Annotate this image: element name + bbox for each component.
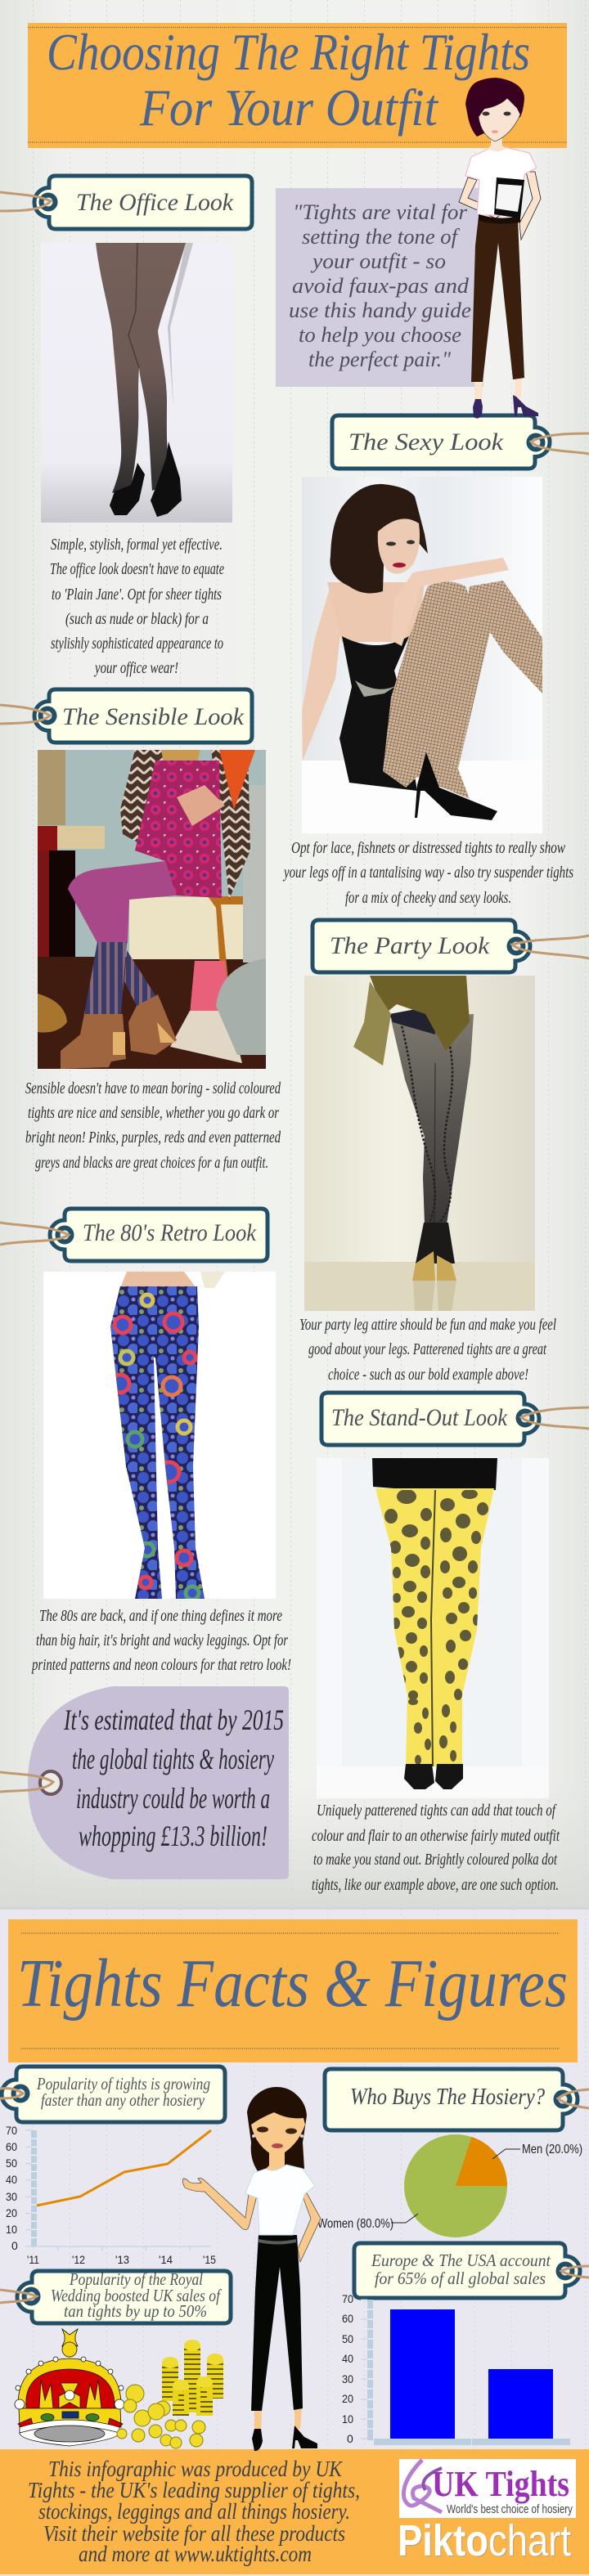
underwear xyxy=(389,1006,435,1034)
neck xyxy=(488,137,506,151)
shoe xyxy=(415,752,497,820)
dress xyxy=(135,761,222,898)
tag: The 80's Retro Look xyxy=(0,1209,268,1261)
line chart: popularity growth: '11 xyxy=(27,2253,39,2266)
photo: retro look leggings xyxy=(43,1272,276,1600)
tag: europe and usa xyxy=(354,2243,589,2298)
arch xyxy=(18,2358,121,2408)
tag: popularity of tights: Popularity of tights is growing xyxy=(36,2074,210,2094)
boots xyxy=(61,1014,126,1069)
cross and orb xyxy=(62,2329,78,2346)
line chart: popularity growth: 30 xyxy=(6,2190,17,2203)
callout: industry worth: the global tights & hosiery xyxy=(72,1743,274,1775)
text: office look description xyxy=(50,536,224,677)
footer band: and more at www.uktights.com xyxy=(79,2542,312,2566)
face xyxy=(251,2112,305,2157)
text: retro look description xyxy=(31,1607,291,1674)
face xyxy=(378,518,420,574)
line chart: popularity growth: '13 xyxy=(115,2253,129,2266)
bar chart: global sales: 30 xyxy=(342,2372,353,2385)
tag: The Sensible Look: The Sensible Look xyxy=(62,703,245,730)
tag: europe and usa: for 65% of all global sales xyxy=(375,2269,546,2288)
line chart: popularity growth: 0 xyxy=(11,2239,18,2252)
torso xyxy=(327,582,425,642)
back arm xyxy=(302,590,340,761)
text: office look description: (such as nude or black) for a xyxy=(65,610,209,628)
text: office look description: Simple, stylish, formal yet effective. xyxy=(51,536,223,554)
text: sexy look description xyxy=(283,839,573,907)
panel: quote: avoid faux-pas and xyxy=(292,274,470,298)
tag: The Stand-Out Look xyxy=(321,1393,589,1445)
hair xyxy=(161,750,200,761)
tag: popularity of tights xyxy=(0,2067,225,2122)
left arm xyxy=(182,2179,257,2230)
text: retro look description: than big hair, it's bright and wacky leggings. Opt for xyxy=(36,1631,288,1649)
line chart: popularity growth: 60 xyxy=(6,2140,17,2153)
coloured scarf xyxy=(219,750,255,810)
bar chart: global sales: 0 xyxy=(347,2432,353,2445)
footer band: Tights - the UK's leading supplier of tights, xyxy=(28,2478,360,2502)
tag: The 80's Retro Look: The 80's Retro Look xyxy=(83,1219,257,1246)
pie chart: who buys xyxy=(317,2134,582,2237)
dark lower left xyxy=(49,850,75,957)
trousers xyxy=(251,2235,303,2411)
tag: europe and usa: Europe & The USA account xyxy=(371,2251,551,2270)
bar chart: global sales: 40 xyxy=(342,2352,353,2365)
tag: royal wedding: tan tights by up to 50% xyxy=(64,2301,207,2321)
text: party look description xyxy=(299,1316,556,1384)
trousers xyxy=(471,217,524,382)
red cap xyxy=(26,2369,115,2408)
tag: royal wedding: Popularity of the Royal xyxy=(69,2269,203,2289)
panel: quote: setting the tone of xyxy=(302,225,461,249)
gold band xyxy=(19,2408,121,2427)
leg pattern xyxy=(401,1022,452,1227)
legs and shoes xyxy=(474,378,522,402)
pie chart: who buys: Women (80.0%) xyxy=(317,2217,393,2231)
callout: industry worth xyxy=(0,1686,289,1879)
neck xyxy=(266,2151,290,2172)
tag: The Office Look xyxy=(0,176,252,229)
callout: industry worth: It's estimated that by 2015 xyxy=(63,1703,284,1736)
hands xyxy=(177,785,225,826)
line chart: popularity growth: 40 xyxy=(6,2173,17,2186)
logo: Piktochart: Piktochart xyxy=(398,2517,572,2566)
shoes xyxy=(252,2429,263,2451)
tablet xyxy=(494,177,524,218)
line chart: popularity growth: 10 xyxy=(6,2223,17,2236)
pearls xyxy=(15,2399,25,2409)
line chart: popularity growth: '14 xyxy=(159,2253,173,2266)
line chart: popularity growth: '12 xyxy=(72,2253,85,2266)
bar chart: global sales: 20 xyxy=(342,2392,353,2405)
line chart: popularity growth: 50 xyxy=(6,2156,17,2170)
icon: crown xyxy=(15,2329,124,2446)
illustration: woman with tablet xyxy=(459,78,541,419)
icon: gold coins xyxy=(117,2340,223,2448)
panel: quote: to help you choose xyxy=(299,323,461,347)
hair xyxy=(330,484,428,593)
hair xyxy=(247,2087,307,2171)
logo: UK Tights: UK Tights xyxy=(432,2464,569,2504)
tag: The Party Look xyxy=(312,920,589,972)
facts banner xyxy=(8,1919,578,2062)
chair xyxy=(129,897,252,959)
text: sexy look description: for a mix of cheeky and sexy looks. xyxy=(345,889,511,907)
text: retro look description: printed patterns and neon colours for that retro look! xyxy=(31,1656,291,1674)
tag: royal wedding xyxy=(0,2269,231,2323)
shoes xyxy=(416,1223,455,1263)
text: office look description: to 'Plain Jane'. Opt for sheer tights xyxy=(52,586,222,604)
illustration: presenter woman xyxy=(182,2087,321,2451)
callout: industry worth: industry could be worth a xyxy=(76,1782,270,1815)
bar chart: global sales: 50 xyxy=(342,2332,353,2345)
floor xyxy=(38,957,266,1069)
tag: The Sensible Look xyxy=(0,689,252,743)
page background: upper section xyxy=(0,0,589,1910)
tag: royal wedding: Wedding boosted UK sales of xyxy=(51,2286,223,2305)
shoes xyxy=(404,1764,463,1789)
sheer legs xyxy=(391,1014,474,1224)
callout: industry worth: whopping £13.3 billion! xyxy=(79,1820,268,1852)
footer band xyxy=(0,2449,589,2576)
hair xyxy=(465,78,524,137)
panel: quote: "Tights are vital for xyxy=(293,200,468,224)
logo: Piktochart: Piktochart xyxy=(398,2516,571,2565)
text: sensible look description: greys and blacks are great choices for a fun outfit. xyxy=(35,1154,268,1172)
bag xyxy=(190,961,227,1011)
tag: The Office Look: The Office Look xyxy=(76,189,234,216)
loose coins xyxy=(117,2385,205,2448)
dress xyxy=(339,636,417,791)
socks xyxy=(84,942,127,1014)
fishnet legs xyxy=(446,581,542,769)
text: sensible look description xyxy=(25,1079,281,1172)
photo: party look xyxy=(304,976,535,1311)
tag: The Sexy Look xyxy=(332,415,589,469)
photo: sexy look xyxy=(302,477,542,833)
white rim xyxy=(20,2420,119,2435)
tights xyxy=(68,861,176,943)
tag: who buys the hosiery: Who Buys The Hosiery? xyxy=(350,2085,545,2110)
text: office look description: The office look doesn't have to equate xyxy=(50,560,224,578)
panel: quote: use this handy guide xyxy=(289,298,471,322)
line chart: popularity growth: '15 xyxy=(203,2253,216,2266)
panel: quote: the perfect pair." xyxy=(308,348,451,371)
trousers legs skin xyxy=(254,2407,302,2433)
skirt xyxy=(372,1458,497,1492)
bar chart: global sales: 70 xyxy=(342,2292,353,2305)
bar chart: global sales xyxy=(342,2292,570,2445)
text: sensible look description: bright neon! Pinks, purples, reds and even patterned xyxy=(25,1129,281,1147)
line chart: popularity growth: 70 xyxy=(6,2124,17,2137)
footer band: stockings, leggings and all things hosiery. xyxy=(38,2499,350,2524)
photo: stand-out look polka dot tights xyxy=(317,1458,549,1798)
title banner xyxy=(28,23,567,148)
text: office look description: your office wear! xyxy=(94,659,178,677)
arms xyxy=(459,177,503,218)
jacket sleeves xyxy=(120,750,164,842)
coin stacks xyxy=(170,2345,215,2416)
text: sensible look description: tights are nice and sensible, whether you go dark or xyxy=(28,1104,279,1122)
line chart: popularity growth: 20 xyxy=(6,2206,17,2219)
page background: facts section xyxy=(0,1910,589,2449)
shirt xyxy=(245,2165,315,2235)
photo: sensible look xyxy=(38,750,266,1069)
fleur decorations xyxy=(39,2380,101,2408)
gems xyxy=(62,2412,79,2418)
flower prints xyxy=(111,1295,199,1600)
text: sensible look description: Sensible doesn't have to mean boring - solid coloured xyxy=(25,1079,281,1097)
dress xyxy=(370,976,470,1051)
tag: The Party Look: The Party Look xyxy=(330,932,490,959)
right arm xyxy=(298,2190,321,2262)
tag: The Sexy Look: The Sexy Look xyxy=(348,429,504,456)
tag: popularity of tights: faster than any other hosiery xyxy=(41,2090,205,2110)
panel: quote xyxy=(276,188,483,387)
face xyxy=(479,98,520,141)
yellow legs xyxy=(375,1488,494,1766)
photo: office look legs xyxy=(41,243,232,523)
text: office look description: stylishly sophisticated appearance to xyxy=(51,635,223,653)
arm on knee xyxy=(391,558,509,646)
footer band: Visit their website for all these products xyxy=(43,2521,345,2546)
shirt xyxy=(465,147,537,215)
polka dots xyxy=(384,1489,488,1765)
line chart: popularity growth xyxy=(6,2124,216,2266)
logo: UK Tights xyxy=(399,2459,576,2518)
text: stand-out look description xyxy=(312,1802,560,1894)
title second line: For Your Outfit xyxy=(139,79,439,137)
tag: The Stand-Out Look: The Stand-Out Look xyxy=(331,1404,508,1431)
bar chart: global sales: 60 xyxy=(342,2312,353,2325)
tag: who buys the hosiery xyxy=(325,2069,589,2130)
text: retro look description: The 80s are back, and if one thing defines it more xyxy=(39,1607,282,1625)
bar chart: global sales: 10 xyxy=(342,2412,353,2426)
footer text: This infographic was produced by UK xyxy=(48,2457,344,2481)
panel: quote: your outfit - so xyxy=(310,249,446,273)
